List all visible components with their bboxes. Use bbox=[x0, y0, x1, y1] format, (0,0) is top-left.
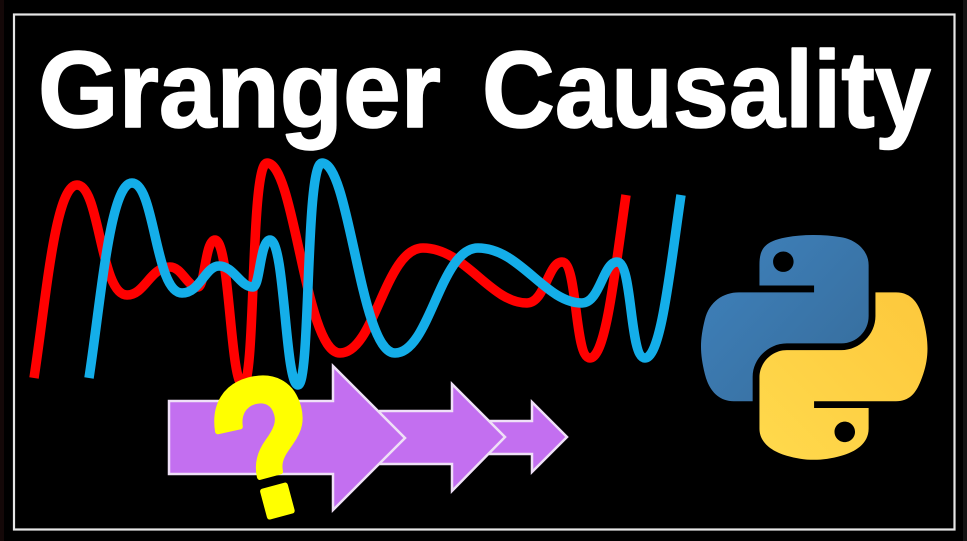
python logo: blue snake bbox=[701, 235, 869, 401]
title bbox=[38, 29, 931, 151]
arrow: large bbox=[169, 366, 405, 510]
arrow: medium bbox=[380, 384, 505, 491]
chart: red time series bbox=[34, 163, 626, 385]
arrow: small bbox=[490, 402, 567, 472]
title: Granger bbox=[38, 29, 441, 151]
title: Causality bbox=[482, 29, 931, 151]
icon: python logo bbox=[701, 235, 927, 460]
python logo: yellow snake bbox=[759, 292, 927, 460]
chart: blue time series bbox=[89, 163, 681, 385]
